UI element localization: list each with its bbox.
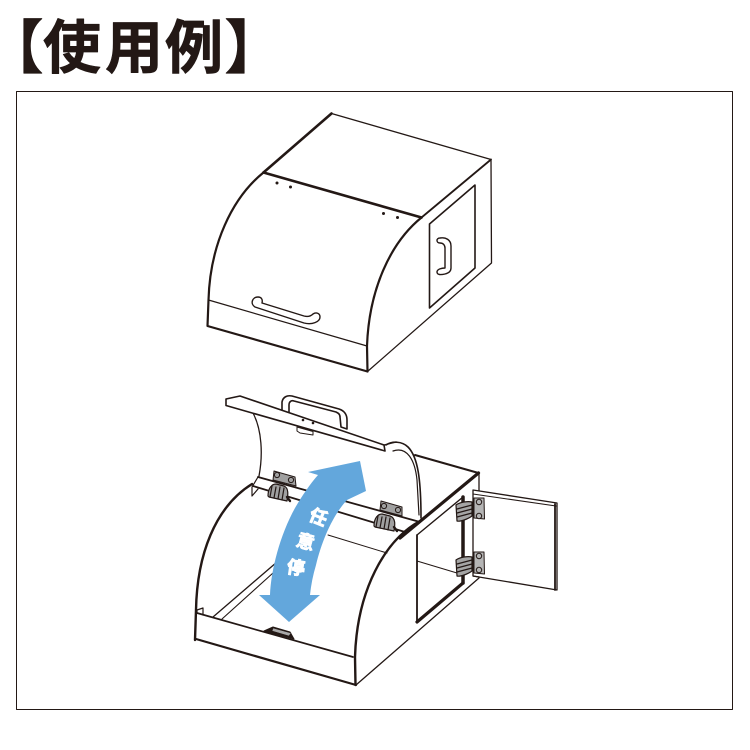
arrow label: 意 <box>294 530 317 554</box>
panel frame <box>16 92 732 710</box>
closed box body <box>208 114 492 372</box>
open storage box <box>195 396 557 685</box>
closed box side door <box>430 185 475 308</box>
arrow label: 停 <box>286 556 306 579</box>
closed box rivets <box>276 182 471 266</box>
right top hinge <box>374 501 402 531</box>
open side door <box>473 490 557 590</box>
open lid <box>226 396 421 518</box>
door hinge lower <box>456 552 484 576</box>
arrow label: 任 <box>306 505 330 530</box>
door hinge upper <box>456 498 484 521</box>
left top hinge <box>268 471 296 501</box>
arrow label <box>286 505 330 579</box>
lid edge plate <box>226 396 385 451</box>
blue double arrow <box>259 461 366 622</box>
closed box front handle <box>252 297 320 324</box>
hinge bar <box>252 477 420 532</box>
title: 【使用例】 <box>13 16 255 81</box>
closed storage box <box>208 114 492 372</box>
closed box side handle <box>437 238 451 275</box>
side opening <box>417 497 463 622</box>
open box shell <box>195 455 479 685</box>
open box front latch <box>264 627 294 639</box>
lid handle <box>282 396 347 429</box>
